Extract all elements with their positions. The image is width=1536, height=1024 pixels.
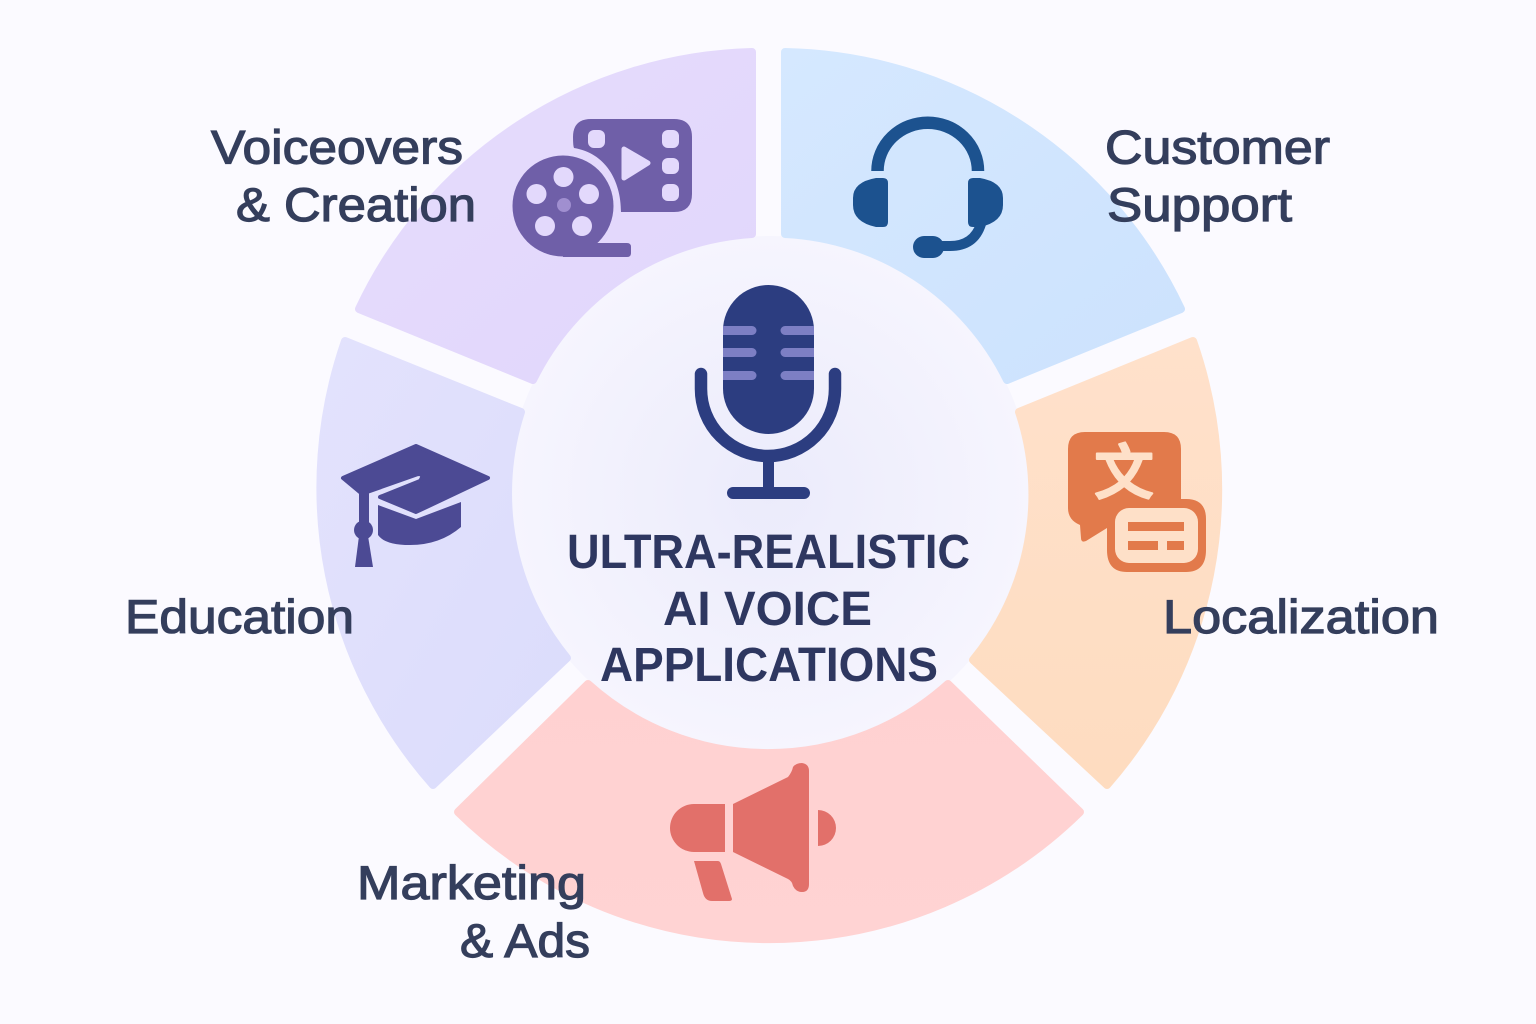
icon: film reel and film strip <box>512 119 692 257</box>
label: customer support: Customer <box>1105 120 1330 174</box>
label: marketing and ads <box>357 856 590 967</box>
panel: localization segment <box>973 341 1218 785</box>
icon: megaphone <box>670 763 836 901</box>
icon: translation bubbles: 文 <box>1094 425 1154 512</box>
title <box>567 526 970 692</box>
label: voiceovers and creation: & Creation <box>236 178 476 231</box>
icon: translation bubbles <box>1068 425 1206 572</box>
title: ULTRA-REALISTIC <box>567 526 970 579</box>
title: AI VOICE <box>663 583 872 636</box>
panel: education segment <box>320 341 567 785</box>
title: APPLICATIONS <box>600 639 938 692</box>
label: marketing and ads: Marketing <box>357 856 586 909</box>
icon: headset <box>853 123 1003 258</box>
icon: microphone <box>701 285 835 499</box>
label: localization: Localization <box>1163 590 1439 643</box>
label: voiceovers and creation <box>211 120 476 231</box>
label: education: Education <box>125 590 354 643</box>
center circle <box>508 236 1032 752</box>
panel: voiceovers and creation segment <box>359 52 752 380</box>
panel: customer support segment <box>785 52 1181 380</box>
label: customer support <box>1105 120 1330 231</box>
panel: marketing and ads segment <box>458 684 1080 939</box>
icon: graduation cap <box>343 446 488 567</box>
label: marketing and ads: & Ads <box>460 914 590 967</box>
label: voiceovers and creation: Voiceovers <box>211 120 463 174</box>
label: customer support: Support <box>1107 178 1292 231</box>
